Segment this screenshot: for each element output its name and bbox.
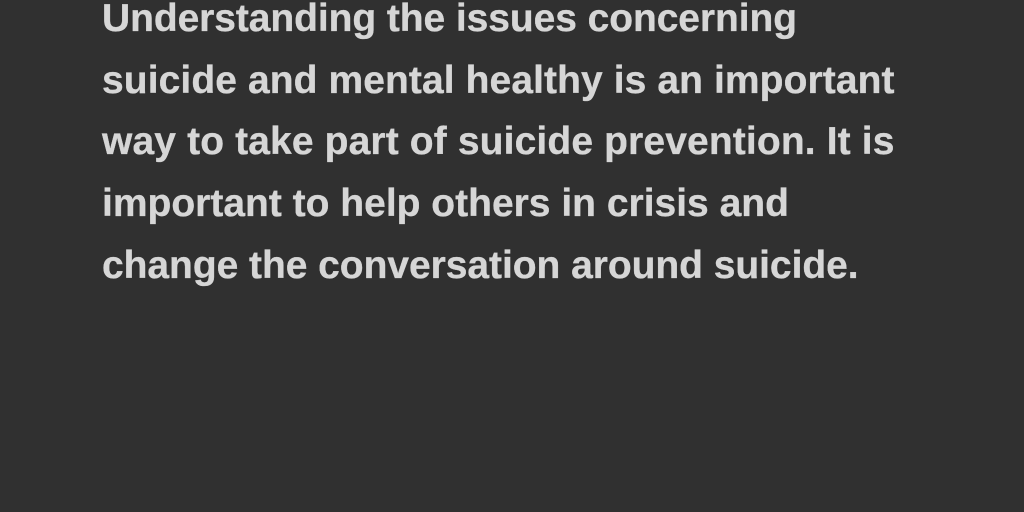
text block: paragraph: change the conversation around suicide. [102, 244, 859, 287]
text block: paragraph: suicide and mental healthy is an important [102, 59, 895, 102]
text block: paragraph: important to help others in crisis and [102, 182, 789, 225]
text block: paragraph: way to take part of suicide prevention. It is [102, 120, 895, 163]
